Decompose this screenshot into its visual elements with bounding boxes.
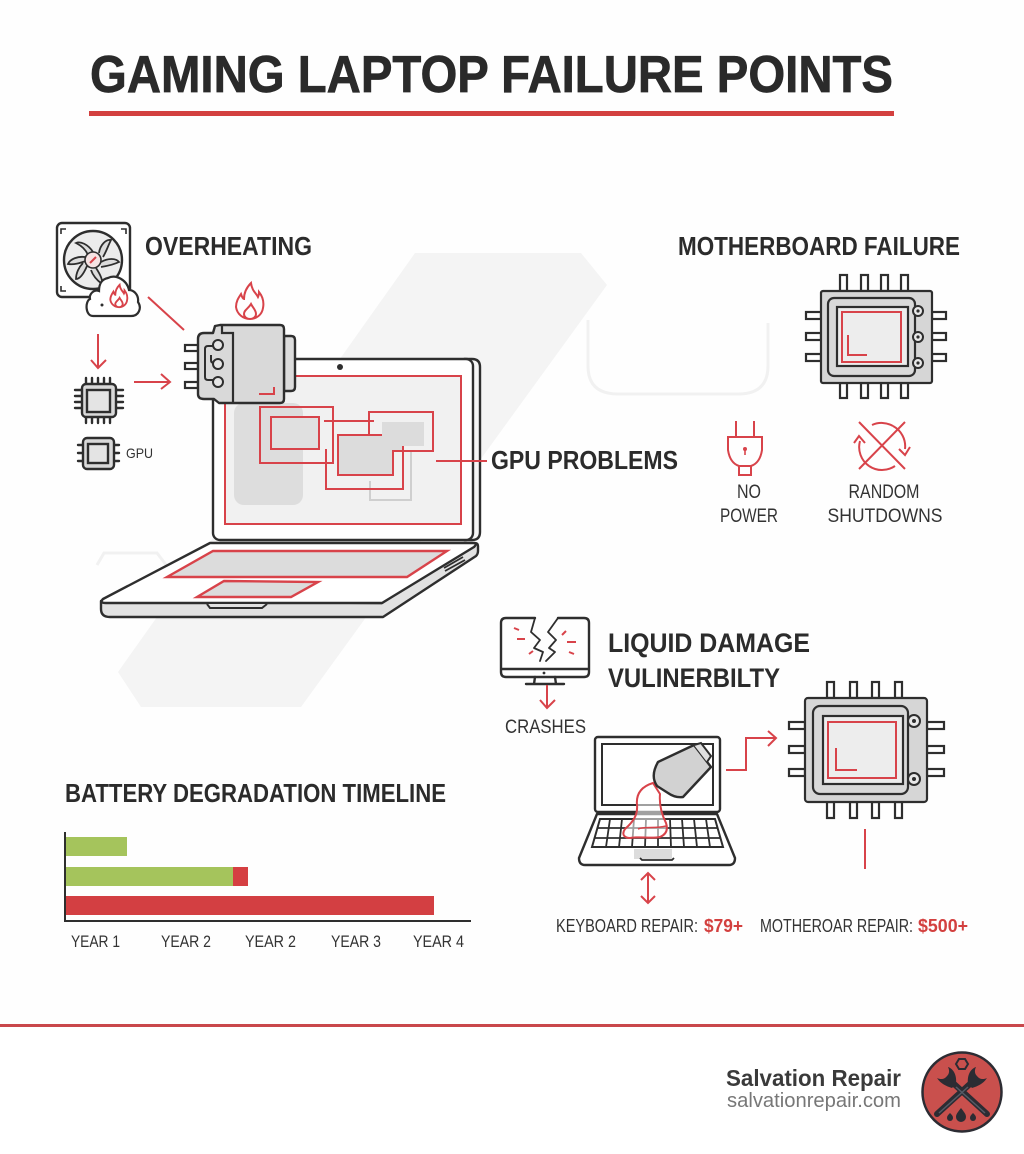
label: motherboard repair cost: MOTHEROAR REPAIR: [760, 916, 913, 936]
icon: GPU chip with label: GPU [126, 445, 153, 461]
icon: logo with crossed wrenches [922, 1052, 1002, 1132]
heading: motherboard failure: MOTHERBOARD FAILURE [678, 231, 960, 261]
heading: liquid damage vulnerability: LIQUID DAMAGE [608, 628, 810, 658]
icon: flame above GPU block [236, 283, 263, 319]
heading: liquid damage vulnerability: VULINERBILTY [608, 663, 780, 693]
label: no power: NO [737, 482, 761, 503]
leader line [864, 829, 866, 869]
label: random shutdowns: RANDOM [848, 482, 920, 503]
arrow: fan to CPU [91, 334, 106, 368]
icon: random shutdowns [854, 422, 910, 470]
label: motherboard repair cost: $500+ [918, 916, 968, 936]
arrow: CPU to GPU block [134, 374, 170, 389]
label: keyboard repair cost: $79+ [704, 916, 743, 936]
icon: no power plug [728, 421, 762, 475]
brand name: Salvation Repair [726, 1065, 901, 1091]
laptop lid [213, 359, 487, 540]
icon: damaged chip [789, 682, 944, 818]
icon: CPU chip [75, 378, 123, 423]
icon: cracked monitor [501, 618, 589, 684]
GPU block [185, 325, 295, 403]
axis labels: YEAR 2 [245, 932, 296, 951]
axis labels [71, 932, 464, 951]
title: GAMING LAPTOP FAILURE POINTS [90, 46, 893, 104]
axis labels: YEAR 1 [71, 932, 120, 951]
icon: laptop with liquid spill [579, 737, 735, 865]
laptop illustration [101, 283, 487, 617]
panel: motherboard failure [678, 231, 960, 527]
panel: battery degradation timeline [65, 778, 471, 951]
laptop base [101, 543, 478, 617]
label: random shutdowns: SHUTDOWNS [828, 506, 942, 527]
icon: motherboard chip [806, 275, 946, 398]
icon: GPU chip with label [78, 438, 153, 469]
arrow: laptop to chip [726, 731, 776, 770]
label: no power: POWER [720, 506, 778, 527]
heading: GPU problems: GPU PROBLEMS [491, 445, 678, 475]
arrow: fan to GPU block [148, 297, 184, 330]
axis labels: YEAR 4 [413, 932, 464, 951]
brand url: salvationrepair.com [727, 1090, 901, 1112]
heading: overheating: OVERHEATING [145, 231, 312, 261]
screen circuit traces [225, 376, 487, 524]
axis labels: YEAR 3 [331, 932, 381, 951]
heading: battery degradation: BATTERY DEGRADATION TIMELINE [65, 778, 446, 808]
axis labels: YEAR 2 [161, 932, 211, 951]
panel: overheating [57, 223, 312, 469]
panel: liquid damage [501, 618, 968, 936]
footer [0, 1024, 1024, 1154]
label: crashes: CRASHES [505, 717, 586, 738]
bar chart [65, 832, 471, 921]
icon: cooling fan with overheating cloud [57, 223, 140, 316]
arrow: keyboard repair double arrow [641, 873, 655, 903]
label: keyboard repair cost: KEYBOARD REPAIR: [556, 916, 698, 936]
arrow: monitor to crashes [540, 685, 555, 708]
